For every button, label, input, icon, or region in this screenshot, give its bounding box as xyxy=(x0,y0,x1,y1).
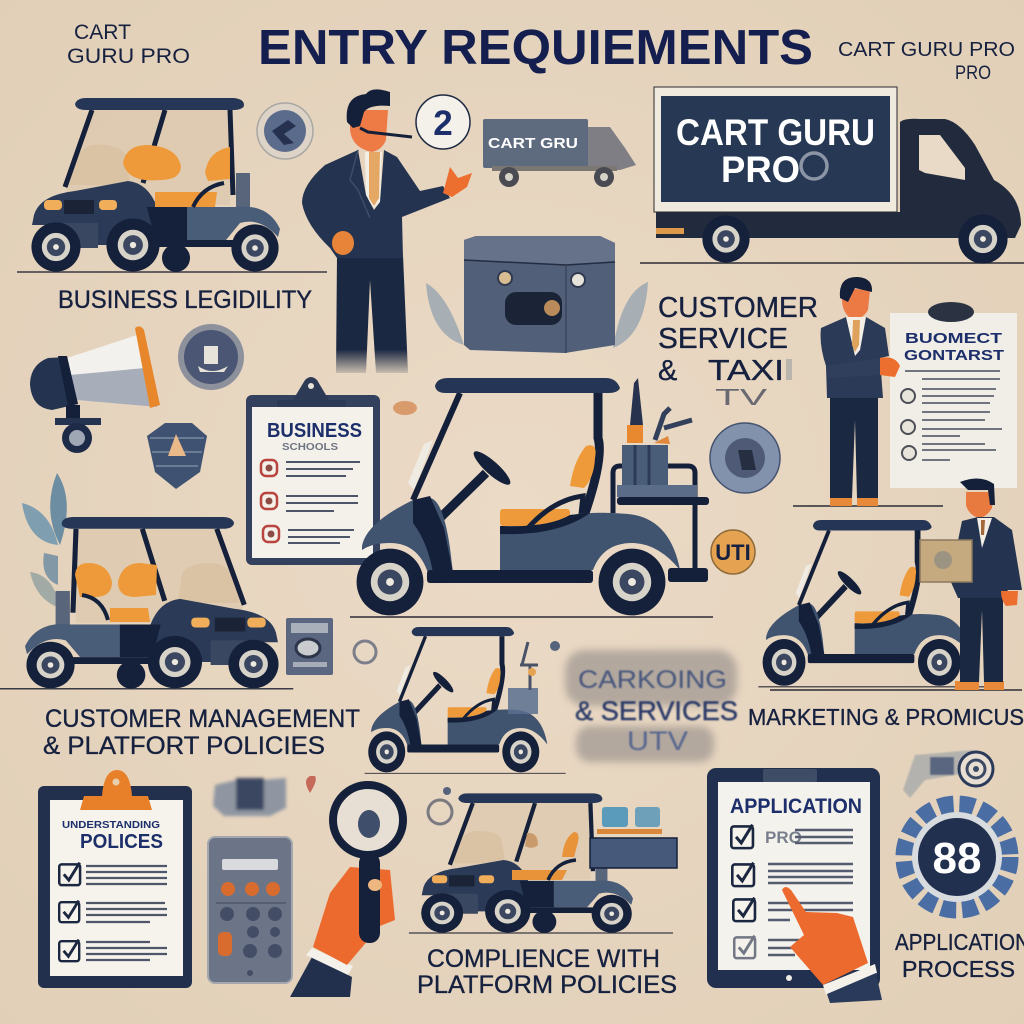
small grey truck: CART GRU xyxy=(488,135,578,152)
contract document: BUOMECT xyxy=(905,330,1002,347)
small marks xyxy=(306,401,560,824)
label: customer management xyxy=(43,705,360,760)
logo text left xyxy=(67,21,190,68)
label: application process: PROCESS xyxy=(902,956,1015,982)
label: customer management: & PLATFORT POLICIES xyxy=(43,732,325,760)
large truck with sign xyxy=(640,87,1024,264)
hand on hip xyxy=(332,231,354,255)
tablet: application xyxy=(707,768,882,1003)
service rack xyxy=(590,807,677,868)
icon: seal badge: 88 xyxy=(933,834,981,883)
label: application process xyxy=(895,929,1024,982)
title: ENTRY REQUIEMENTS xyxy=(258,21,813,75)
small golf cart bottom xyxy=(409,793,677,933)
man with parcel xyxy=(770,478,1022,690)
logo text right: CART GURU PRO xyxy=(838,39,1015,61)
tool rack xyxy=(613,378,709,582)
presenter in suit xyxy=(302,89,472,373)
clipboard: policies: UNDERSTANDING xyxy=(62,820,160,831)
label: customer service: SERVICE xyxy=(658,323,788,355)
check items xyxy=(731,825,853,958)
orange seats xyxy=(75,563,157,622)
lamp and crate xyxy=(508,642,538,714)
tablet: application: APPLICATION xyxy=(730,795,862,818)
icon: small square badge xyxy=(286,618,333,675)
small golf cart middle xyxy=(365,627,566,773)
contract document xyxy=(890,302,1017,488)
golf cart centre xyxy=(350,378,713,617)
icon: shield badge xyxy=(147,423,207,489)
label: customer service: CUSTOMER xyxy=(658,292,818,324)
clipboard: business: BUSINESS xyxy=(267,420,362,442)
small grey truck xyxy=(483,119,636,187)
icon: seal badge xyxy=(904,804,1010,910)
icon: UTI badge: UTI xyxy=(715,540,751,565)
hand pointing xyxy=(782,887,868,985)
open hand xyxy=(443,167,472,197)
icon: round badge xyxy=(178,324,244,390)
icon: magnifier with hand xyxy=(290,785,403,997)
icon: megaphone xyxy=(30,326,160,453)
label: customer management: CUSTOMER MANAGEMENT xyxy=(45,705,360,733)
icon: round badge right xyxy=(710,423,780,493)
icon: number badge xyxy=(416,95,470,149)
large truck with sign: CART GURU xyxy=(676,112,875,153)
label: blurred services panel: UTV xyxy=(627,726,688,756)
trousers xyxy=(336,255,408,373)
icon: UTI badge xyxy=(711,530,755,574)
label: compliance: COMPLIENCE WITH xyxy=(427,945,660,973)
label: blurred services panel xyxy=(565,650,738,762)
jacket xyxy=(302,150,450,258)
icon: round badge top xyxy=(257,103,313,159)
golf cart lower right xyxy=(758,520,991,687)
checklist rows xyxy=(261,460,360,543)
icon: calculator xyxy=(208,837,292,983)
clipboard: business: SCHOOLS xyxy=(282,442,338,453)
logo text right xyxy=(838,39,1015,84)
golf cart top left xyxy=(17,98,327,272)
contract document: GONTARST xyxy=(904,347,1004,364)
label: customer service: TV xyxy=(715,384,768,410)
label: compliance xyxy=(417,945,677,999)
logo text left: GURU PRO xyxy=(67,45,190,68)
icon: slate safe box with leaves xyxy=(426,236,648,353)
check items xyxy=(59,863,167,961)
clipboard: business xyxy=(246,377,380,565)
logo text left: CART xyxy=(74,21,131,44)
clipboard: policies xyxy=(38,770,192,988)
label: compliance: PLATFORM POLICIES xyxy=(417,971,677,999)
plant xyxy=(22,473,67,608)
tablet: application: PRO xyxy=(765,828,802,847)
icon: small device xyxy=(213,778,286,816)
icon: number badge: 2 xyxy=(433,104,453,143)
head xyxy=(350,110,388,152)
golf cart lower left xyxy=(0,517,293,689)
clipboard: policies: POLICES xyxy=(80,831,163,853)
orange seats xyxy=(512,832,578,880)
label: customer service xyxy=(658,292,818,410)
label: blurred services panel: & SERVICES xyxy=(575,696,738,726)
man with contract xyxy=(793,277,943,506)
icon: target and gadget xyxy=(903,750,993,798)
label: customer service: TAXI xyxy=(708,355,784,387)
large truck with sign: PRO xyxy=(721,149,800,190)
label: business legidility: BUSINESS LEGIDILITY xyxy=(58,286,312,314)
logo text right: PRO xyxy=(955,63,991,84)
label: blurred services panel: CARKOING xyxy=(578,666,727,694)
label: customer service: & xyxy=(658,355,677,387)
